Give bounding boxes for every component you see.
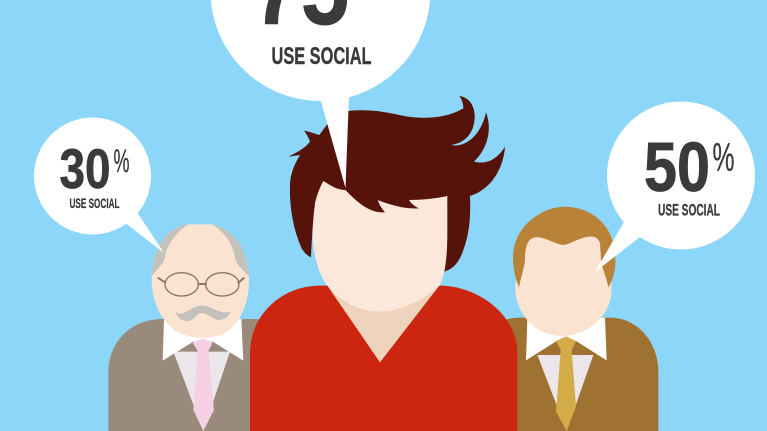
right man tie [556,336,576,431]
caption: USE SOCIAL [272,43,372,70]
older man shirt [173,352,230,431]
older man hair right [212,224,249,277]
right man suit [500,318,658,431]
main person hair [288,96,505,257]
right man collar [526,318,607,360]
right man shirt [537,355,593,431]
figure: man on right [500,207,658,431]
speech bubble: 50%: % [712,136,734,180]
speech bubble: 30% [34,118,164,253]
speech bubble: 30%: % [114,143,130,179]
figure: older man [108,224,263,431]
right man face [515,237,612,336]
caption: USE SOCIAL [70,195,120,211]
value: 30%: 30 [60,137,110,200]
figure: main person [250,96,517,431]
main person face [313,167,447,312]
right man body [500,318,658,431]
right man hair [513,207,615,287]
older man glasses [158,273,244,296]
older man tie [193,338,214,431]
older man suit [108,319,263,431]
older man mustache [176,306,231,321]
main person sweater [250,286,517,431]
caption: USE SOCIAL [658,202,720,220]
older man head [152,224,249,338]
right man head [513,207,615,336]
older man hair left [152,224,188,277]
older man face [152,224,249,338]
value: 50%: 50 [644,128,710,206]
older man body [108,319,263,431]
speech bubble: 75% [210,0,430,188]
main person neck [327,286,439,362]
older man collar [163,319,243,361]
speech bubble: 50% [595,102,755,272]
main person back hair [443,196,470,272]
